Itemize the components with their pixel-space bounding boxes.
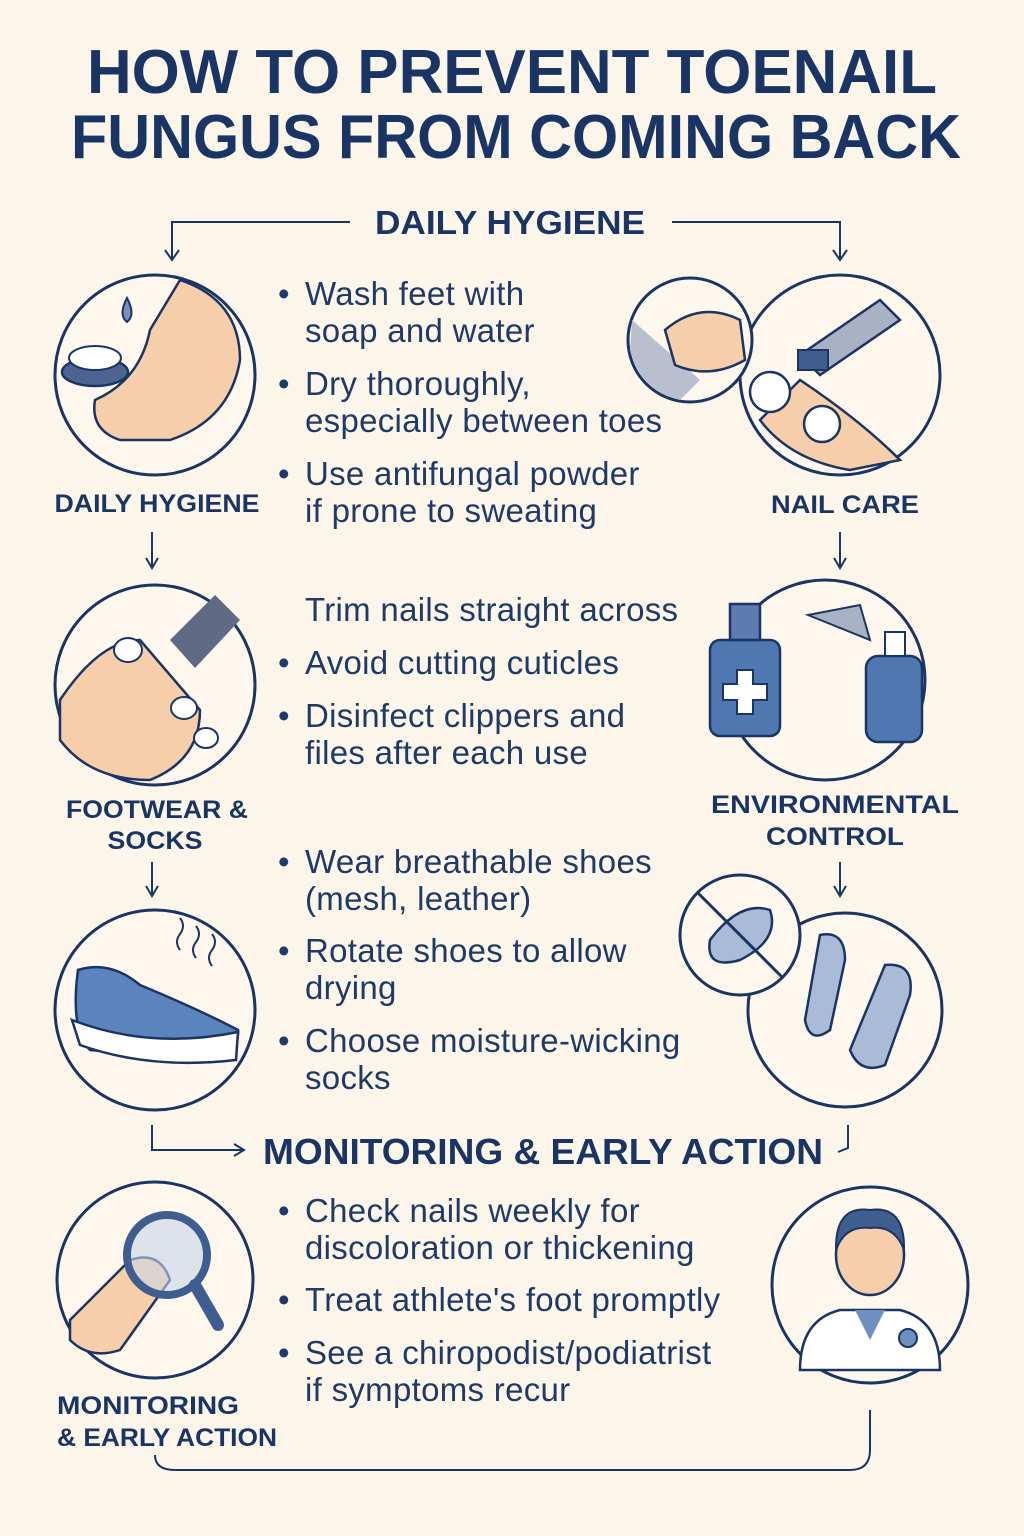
bullets: footwear: Rotate shoes to allow (305, 932, 627, 969)
icon: finger nails (55, 585, 255, 785)
bullets: daily hygiene: if prone to sweating (305, 492, 597, 529)
label: footwear & socks: SOCKS (108, 827, 202, 855)
title: FUNGUS FROM COMING BACK (71, 103, 961, 172)
label: footwear & socks (66, 796, 248, 855)
bullets: daily hygiene: Use antifungal powder (305, 455, 640, 492)
icon: doctor (772, 1187, 968, 1383)
bullets: monitoring: See a chiropodist/podiatrist (305, 1334, 711, 1371)
label: footwear & socks: FOOTWEAR & (66, 796, 248, 824)
bullets: footwear: Wear breathable shoes (305, 843, 652, 880)
title: HOW TO PREVENT TOENAIL (87, 38, 937, 107)
bullets: nail care: Trim nails straight across (305, 591, 678, 628)
bullets: monitoring: if symptoms recur (305, 1371, 570, 1408)
icon: magnifier (57, 1182, 253, 1378)
arrows down (146, 532, 846, 896)
bullets: monitoring: • (278, 1192, 290, 1229)
title (71, 38, 961, 172)
bullets: nail care: • (278, 644, 290, 681)
bullets: footwear: (mesh, leather) (305, 880, 531, 917)
label: monitoring: MONITORING (57, 1392, 239, 1420)
bullets: footwear: Choose moisture-wicking (305, 1022, 681, 1059)
label: environmental control (711, 791, 959, 851)
bullets: daily hygiene: • (278, 365, 290, 402)
bullets: daily hygiene (278, 275, 662, 529)
bullets: footwear: • (278, 843, 290, 880)
bullets: daily hygiene: • (278, 455, 290, 492)
label: environmental control: CONTROL (766, 823, 904, 851)
arrow: top left (165, 222, 350, 260)
bullets: daily hygiene: especially between toes (305, 402, 662, 439)
bullets: footwear: drying (305, 969, 397, 1006)
bullets: nail care (278, 591, 678, 771)
bullets: daily hygiene: Wash feet with (305, 275, 524, 312)
bullets: footwear: • (278, 932, 290, 969)
icon: shoe (55, 910, 255, 1110)
bullets: monitoring (278, 1192, 721, 1408)
section heading: monitoring: MONITORING & EARLY ACTION (263, 1131, 823, 1172)
label: environmental control: ENVIRONMENTAL (711, 791, 959, 819)
label: monitoring: & EARLY ACTION (57, 1424, 277, 1452)
bullets: daily hygiene: • (278, 275, 290, 312)
label: monitoring (57, 1392, 277, 1452)
label: daily hygiene: DAILY HYGIENE (54, 490, 260, 518)
icon: foot washing (55, 275, 255, 475)
bullets: footwear (278, 843, 681, 1096)
icon: disinfectant (710, 580, 925, 780)
arrow: top right (672, 222, 847, 260)
bullets: monitoring: • (278, 1281, 290, 1318)
bullets: nail care: files after each use (305, 734, 588, 771)
bullets: nail care: • (278, 697, 290, 734)
bullets: daily hygiene: soap and water (305, 312, 535, 349)
bullets: monitoring: • (278, 1334, 290, 1371)
arrow: to monitoring (152, 1125, 848, 1156)
bullets: monitoring: Treat athlete's foot promptly (305, 1281, 721, 1318)
bullets: daily hygiene: Dry thoroughly, (305, 365, 531, 402)
icon: flip flops (680, 875, 942, 1107)
section heading: daily hygiene: DAILY HYGIENE (375, 204, 645, 241)
bullets: nail care: Avoid cutting cuticles (305, 644, 619, 681)
bullets: footwear: socks (305, 1059, 391, 1096)
bullets: monitoring: Check nails weekly for (305, 1192, 640, 1229)
label: nail care: NAIL CARE (771, 491, 919, 519)
bullets: nail care: Disinfect clippers and (305, 697, 625, 734)
bullets: footwear: • (278, 1022, 290, 1059)
arrow: bottom loop (155, 1410, 870, 1470)
icon: nail care (628, 275, 940, 475)
bullets: monitoring: discoloration or thickening (305, 1229, 695, 1266)
